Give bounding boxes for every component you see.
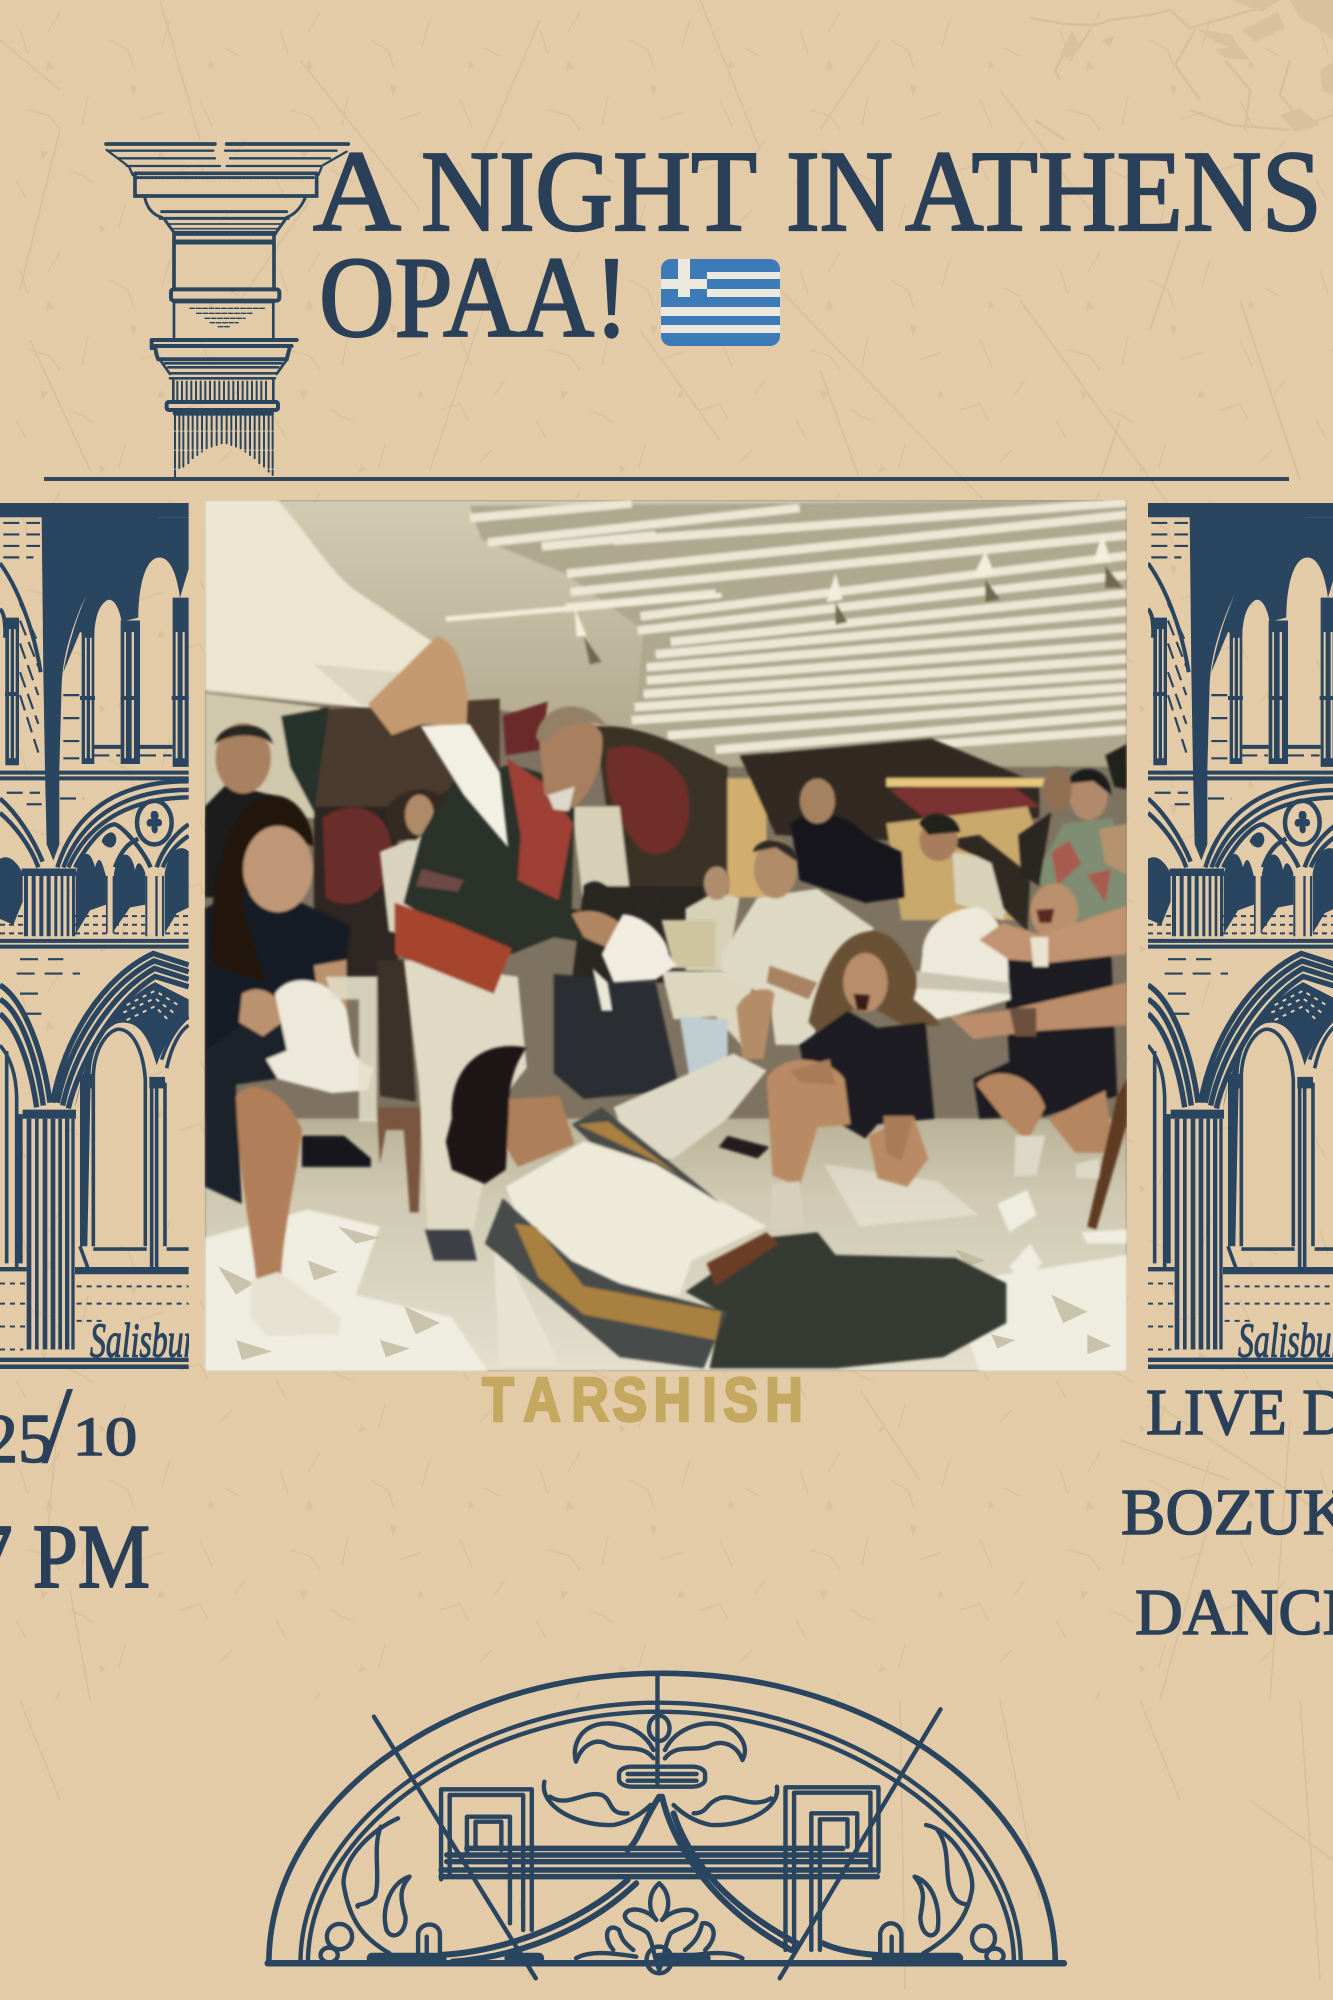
brand name: TARSHISH: [482, 1366, 803, 1435]
photo: plate smashing party: [205, 500, 1127, 1371]
title line 1: IN: [786, 128, 893, 256]
ceiling: [205, 500, 1127, 767]
date: 10: [73, 1406, 137, 1467]
man on floor: [446, 989, 1006, 1368]
date: /: [42, 1364, 73, 1486]
ornament: semicircular fanlight: [268, 1673, 1064, 1978]
icon: Greek flag: [661, 259, 780, 346]
title line 1: A: [313, 128, 401, 256]
title line 2: OPAA!: [319, 234, 629, 362]
woman with plates, left: [205, 795, 422, 1336]
old man in costume: [395, 706, 629, 1261]
panel: cathedral engraving left: [0, 503, 189, 1369]
back wall and foliage: [205, 693, 1051, 982]
title line 1: NIGHT: [421, 128, 757, 256]
table and glasses: [554, 920, 752, 1099]
plates in old man's hands: [602, 914, 677, 982]
floor: [205, 1119, 1127, 1371]
column illustration: [106, 144, 348, 477]
background guests: [205, 723, 1127, 971]
title line 1: [313, 128, 1322, 256]
raised arm with plate shard: [205, 500, 508, 847]
right-hand woman and plate stack: [913, 883, 1127, 1229]
seated man in white shirt: [722, 839, 874, 1045]
panel: cathedral engraving right: [1148, 503, 1333, 1367]
divider rule: [44, 477, 1289, 481]
laughing woman kneeling: [719, 931, 940, 1229]
